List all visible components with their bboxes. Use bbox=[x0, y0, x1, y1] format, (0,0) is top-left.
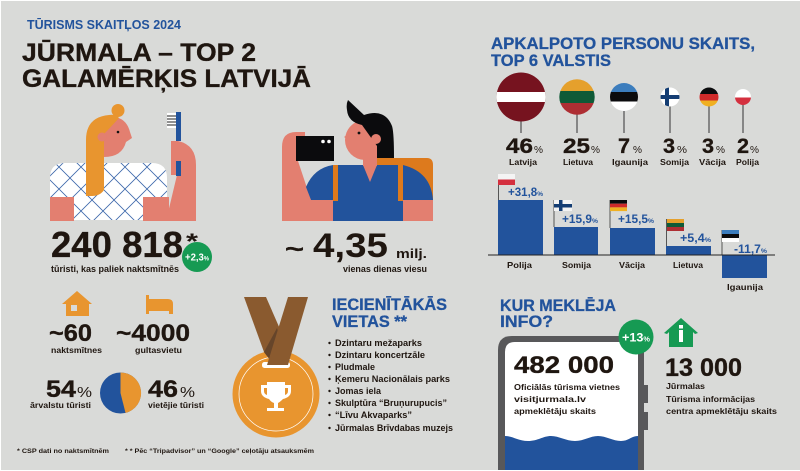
list: favourite places: Dzintaru koncertzāle bbox=[335, 350, 425, 360]
list: favourite places bbox=[328, 338, 453, 433]
country shares: 3 bbox=[663, 135, 675, 158]
flag pin: Lithuania bbox=[559, 79, 595, 133]
stat: local tourists bbox=[148, 376, 204, 410]
bar: Polija: Polija bbox=[507, 260, 532, 270]
kicker: TŪRISMS SKAITĻOS 2024 bbox=[27, 18, 181, 32]
badge: +13%: +13% bbox=[622, 330, 651, 344]
illustration: woman with toothbrush bbox=[50, 104, 196, 221]
list: favourite places: Skulptūra “Bruņurupucis” bbox=[335, 398, 447, 408]
badge: +13% bbox=[618, 320, 654, 354]
stat: information centre visitors: centra apmeklētāju skaits bbox=[666, 406, 777, 416]
stat: accommodation: naktsmītnes bbox=[51, 346, 103, 355]
title: JŪRMALA – TOP 2 bbox=[22, 39, 256, 67]
stat: information centre visitors: 13 000 bbox=[665, 354, 742, 382]
country shares: 46 bbox=[506, 135, 533, 158]
bar: Lietuva: Lietuva bbox=[673, 260, 703, 270]
icon: bed bbox=[146, 295, 173, 314]
heading: favourite places: IECIENĪTĀKĀS bbox=[332, 295, 447, 314]
bar: Vācija bbox=[610, 200, 655, 270]
list: favourite places: Jūrmalas Brīvdabas muzejs bbox=[335, 423, 453, 433]
icon: house bbox=[62, 291, 92, 316]
list: favourite places: Dzintaru mežaparks bbox=[335, 338, 422, 348]
stat: foreign tourists: 54 bbox=[46, 376, 77, 403]
stat: overnight tourists: 240 818 bbox=[51, 224, 183, 265]
flag pin: Finland bbox=[660, 87, 680, 133]
heading: top 6 countries: APKALPOTO PERSONU SKAITS, bbox=[491, 35, 755, 53]
heading: favourite places: VIETAS ** bbox=[332, 313, 408, 331]
country shares: Polija bbox=[736, 158, 760, 167]
heading: favourite places bbox=[332, 295, 447, 331]
country shares: 2 bbox=[737, 135, 749, 158]
phone: website visitors: apmeklētāju skaits bbox=[514, 406, 596, 416]
stat: foreign tourists: ārvalstu tūristi bbox=[30, 401, 91, 410]
country shares: % bbox=[591, 144, 600, 156]
stat: accommodation bbox=[49, 320, 103, 355]
pie chart: tourists bbox=[100, 372, 141, 414]
bar: Igaunija bbox=[722, 230, 767, 292]
stat: day visitors: milj. bbox=[396, 246, 427, 261]
stat: foreign tourists bbox=[30, 376, 92, 410]
title bbox=[22, 39, 311, 93]
flag pin: Germany bbox=[699, 87, 719, 133]
flag pin: Estonia bbox=[610, 83, 638, 133]
footnotes: * * Pēc “Tripadvisor” un “Google” ceļotāju atsauksmēm bbox=[125, 448, 314, 455]
country shares: Latvija bbox=[509, 158, 538, 167]
stat: day visitors: 4,35 bbox=[313, 227, 388, 265]
country shares: % bbox=[716, 144, 725, 156]
badge: +2,3% bbox=[182, 242, 212, 272]
country shares: % bbox=[750, 144, 759, 156]
list: favourite places: Jomas iela bbox=[335, 386, 382, 396]
list: favourite places: Ķemeru Nacionālais parks bbox=[335, 374, 450, 384]
bar: Igaunija: Igaunija bbox=[727, 282, 763, 292]
stat: information centre visitors bbox=[665, 354, 777, 416]
footnotes: * CSP dati no naktsmītnēm bbox=[17, 448, 109, 455]
bar: Somija: Somija bbox=[562, 260, 591, 270]
stat: beds: ~4000 bbox=[116, 320, 190, 347]
stat: overnight tourists: * bbox=[186, 229, 199, 254]
stat: beds: gultasvietu bbox=[135, 346, 182, 355]
country shares: 3 bbox=[702, 135, 714, 158]
icon: trophy bbox=[261, 382, 291, 411]
stat: day visitors bbox=[285, 227, 427, 274]
country shares bbox=[506, 135, 760, 167]
country shares: % bbox=[633, 144, 642, 156]
bar: Lietuva bbox=[666, 219, 711, 270]
country shares: Vācija bbox=[699, 158, 727, 167]
phone: website visitors bbox=[498, 336, 648, 470]
list: favourite places: Pludmale bbox=[335, 362, 375, 372]
bar: Polija: +31,8% bbox=[508, 187, 543, 199]
flag pin: Latvia bbox=[496, 72, 546, 133]
illustration: man with phone bbox=[282, 100, 433, 221]
bar: Lietuva: +5,4 % bbox=[680, 233, 711, 245]
stat: local tourists: 46 bbox=[148, 376, 178, 403]
country shares: Igaunija bbox=[612, 158, 649, 167]
icon: info house bbox=[664, 318, 698, 347]
list: favourite places: “Līvu Akvaparks” bbox=[335, 410, 412, 420]
country shares: % bbox=[534, 144, 543, 156]
bar: Igaunija: -11,7% bbox=[734, 244, 767, 256]
country shares: % bbox=[677, 144, 687, 156]
country shares: 7 bbox=[618, 135, 630, 158]
phone: website visitors: Oficiālās tūrisma vietnes bbox=[514, 382, 620, 392]
heading: top 6 countries bbox=[491, 35, 755, 70]
flag pin: Poland bbox=[735, 89, 751, 133]
bar: Somija bbox=[554, 200, 598, 270]
stat: information centre visitors: Jūrmalas bbox=[666, 381, 705, 391]
stat: overnight tourists: tūristi, kas paliek naktsmītnēs bbox=[51, 264, 179, 274]
bar: Vācija: +15,5% bbox=[618, 214, 654, 226]
phone: website visitors: visitjurmala.lv bbox=[514, 394, 586, 404]
stat: day visitors: ~ bbox=[285, 236, 304, 263]
heading: where info was searched bbox=[500, 296, 616, 331]
badge: +2,3%: +2,3% bbox=[185, 252, 210, 264]
phone: website visitors: 482 000 bbox=[514, 352, 614, 379]
country shares: 25 bbox=[563, 135, 590, 158]
stat: foreign tourists: % bbox=[77, 384, 92, 401]
stat: information centre visitors: Tūrisma informācijas bbox=[666, 394, 755, 404]
bar: Vācija: Vācija bbox=[619, 260, 645, 270]
stat: local tourists: % bbox=[180, 384, 195, 401]
country shares: Lietuva bbox=[563, 158, 594, 167]
stat: day visitors: vienas dienas viesu bbox=[343, 264, 427, 274]
stat: local tourists: vietējie tūristi bbox=[148, 401, 204, 410]
heading: where info was searched: INFO? bbox=[500, 313, 553, 331]
bar chart: change by country bbox=[488, 174, 775, 292]
footnotes bbox=[17, 448, 314, 455]
stat: accommodation: ~60 bbox=[49, 320, 92, 347]
icon: medal bbox=[232, 297, 320, 438]
bar: Polija bbox=[498, 174, 543, 270]
heading: where info was searched: KUR MEKLĒJA bbox=[500, 296, 616, 315]
country shares: Somija bbox=[660, 158, 690, 167]
bar: Somija: +15,9% bbox=[562, 214, 598, 226]
heading: top 6 countries: TOP 6 VALSTIS bbox=[491, 52, 611, 70]
title: GALAMĒRĶIS LATVIJĀ bbox=[22, 65, 311, 93]
